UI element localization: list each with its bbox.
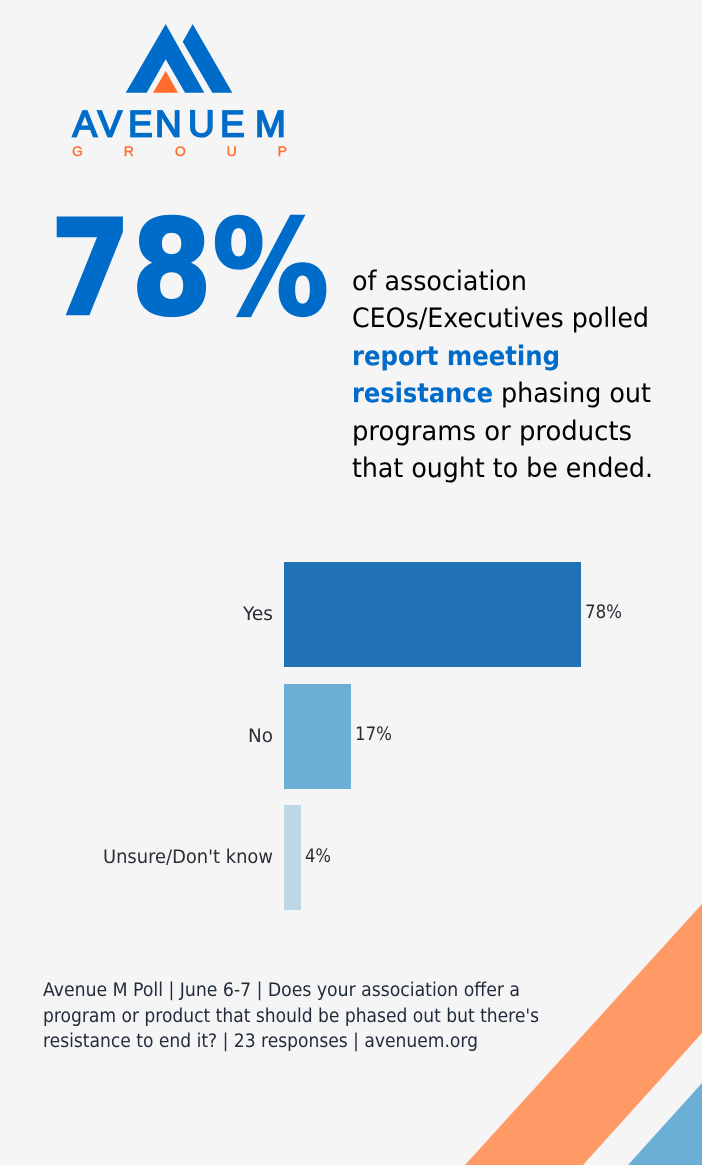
bar: Unsure 4% xyxy=(103,805,331,910)
logo subtitle: GROUP xyxy=(72,143,287,159)
bar: Yes 78%: Yes xyxy=(242,604,273,625)
footnote: program or product that should be phased out but there's xyxy=(43,1006,539,1027)
bar: Yes 78%: 78% xyxy=(585,602,622,623)
bar: No 17%: 17% xyxy=(355,724,392,745)
statement text: of association xyxy=(352,266,527,297)
decorative orange stripe xyxy=(465,904,702,1165)
logo: Avenue M Group xyxy=(72,24,287,159)
icon: mountain mark xyxy=(126,24,232,93)
logo wordmark: AVENUE M xyxy=(72,104,286,144)
bar: No 17% xyxy=(248,684,392,789)
bar: Yes 78% xyxy=(242,562,622,667)
footnote xyxy=(43,980,539,1052)
footnote: resistance to end it? | 23 responses | avenuem.org xyxy=(43,1031,478,1052)
footnote: Avenue M Poll | June 6-7 | Does your association offer a xyxy=(43,980,520,1001)
big statistic: 78% xyxy=(50,192,329,346)
statement text xyxy=(352,266,653,484)
statement text: report meeting xyxy=(352,341,560,372)
statement text: resistance xyxy=(352,378,493,409)
bar: Unsure 4%: Unsure/Don't know xyxy=(103,847,273,868)
statement text: that ought to be ended. xyxy=(352,453,653,484)
decorative blue stripe xyxy=(628,1083,702,1165)
bar: No 17%: No xyxy=(248,726,273,747)
statement text: programs or products xyxy=(352,416,632,447)
statement text: phasing out xyxy=(501,378,651,409)
statement text: CEOs/Executives polled xyxy=(352,303,649,334)
bar chart xyxy=(103,562,622,910)
bar: Unsure 4%: 4% xyxy=(305,846,331,867)
